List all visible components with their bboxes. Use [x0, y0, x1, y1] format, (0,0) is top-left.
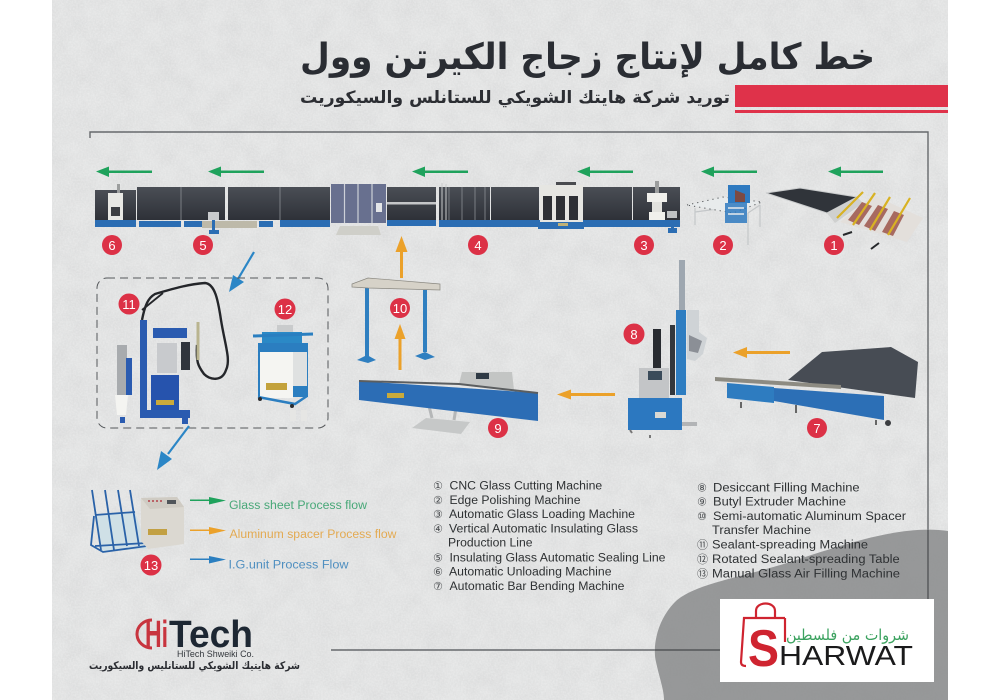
blue arrow: sealant to gas filling — [157, 426, 189, 470]
badge 10: 10 — [393, 301, 407, 316]
key: glass sheet — [190, 497, 368, 512]
machine legend: left column: Edge Polishing Machine — [450, 495, 580, 507]
number badges on the top line: 4 — [474, 238, 482, 253]
machine legend: left column: Automatic Unloading Machine — [449, 566, 612, 578]
machine legend: right column: Sealant-spreading Machine — [712, 540, 868, 552]
blue arrow: line to sealant station — [229, 252, 254, 292]
machine legend: left column: Production Line — [448, 538, 532, 550]
machine legend: right column: Butyl Extruder Machine — [713, 497, 846, 509]
machine legend: left column: ① — [433, 479, 443, 492]
logo english tagline: HiTech Shweiki Co. — [177, 649, 254, 660]
loader units — [540, 182, 583, 226]
machine legend: left column: Insulating Glass Automatic Sealing Line — [450, 552, 666, 564]
key: aluminum spacer: Aluminum spacer Process flow — [230, 529, 397, 541]
logo arc — [137, 620, 152, 648]
key: aluminum spacer — [190, 527, 397, 541]
machine 7: automatic bar bending — [715, 347, 918, 426]
red accent bar — [735, 85, 948, 113]
machine legend: right column: ⑪ — [697, 539, 708, 552]
machine 11: sealant-spreading machine — [115, 283, 228, 424]
machine legend: right column: ⑨ — [697, 496, 707, 509]
machine 10: spacer transfer — [352, 278, 440, 363]
machine legend: left column: Automatic Glass Loading Machine — [449, 509, 635, 521]
badge 7 — [807, 418, 827, 438]
badge 13 — [140, 554, 162, 576]
green process arrows — [96, 166, 883, 177]
machine legend: left column: CNC Glass Cutting Machine — [450, 480, 602, 492]
horizontal frame in line — [387, 202, 436, 204]
orange arrow: spacer transfer up to line — [396, 236, 408, 278]
insulating glass production line — [95, 181, 680, 235]
blue conveyor base — [95, 220, 680, 229]
machine legend: right column: ⑩ — [697, 510, 707, 523]
orange arrow: bar bending to desiccant — [733, 347, 790, 358]
number badges on the top line: 3 — [640, 238, 648, 253]
orange arrow: butyl to transfer — [394, 324, 406, 370]
machine legend: right column: Desiccant Filling Machine — [713, 483, 860, 495]
dashed sealant group box — [97, 278, 328, 428]
shopping bag icon — [741, 604, 785, 666]
number badges on the top line: 5 — [199, 238, 207, 253]
machine legend: right column: ⑧ — [697, 482, 707, 495]
badge 11: 11 — [122, 297, 136, 312]
machine legend: right column: Semi-automatic Aluminum Spacer — [713, 511, 906, 523]
letter S: S — [748, 620, 779, 678]
machine legend: right column: ⑫ — [697, 553, 708, 566]
dark glass panels — [95, 187, 680, 220]
badge 12: 12 — [278, 302, 292, 317]
gray blob corner shape — [655, 530, 948, 700]
badge 10 — [390, 298, 410, 318]
orange arrow: desiccant to butyl — [557, 390, 615, 400]
badge 9: 9 — [494, 421, 502, 436]
key: IG unit: I.G.unit Process Flow — [228, 560, 349, 572]
arabic wordmark: شروات من فلسطين — [786, 626, 909, 644]
badge 8 — [624, 324, 644, 344]
machine legend: left column: ② — [433, 494, 443, 507]
badge 12 — [274, 298, 296, 320]
title: خط كامل لإنتاج زجاج الكيرتن وول — [300, 37, 875, 78]
machine legend: right column: Transfer Machine — [712, 525, 811, 537]
machine legend: right column: Manual Glass Air Filling Machine — [712, 568, 900, 580]
badge 7: 7 — [813, 421, 821, 436]
machine 12: rotated sealant table — [253, 325, 313, 421]
machine legend: left column: ⑦ — [433, 580, 443, 593]
flow key — [190, 497, 397, 572]
badge 13: 13 — [144, 558, 158, 573]
machine 9: butyl extruder — [359, 372, 538, 434]
machine legend: left column: ④ — [433, 523, 443, 536]
number badges on the top line — [102, 235, 844, 255]
machine legend: left column: Vertical Automatic Insulating Glass — [449, 524, 638, 536]
machine legend: left column: Automatic Bar Bending Machine — [450, 581, 624, 593]
machine legend: left column: ⑤ — [433, 551, 443, 564]
frame lines — [90, 132, 928, 650]
machine legend: right column: ⑬ — [697, 567, 708, 580]
panel seams — [181, 183, 485, 220]
number badges on the top line: 1 — [830, 238, 838, 253]
key: IG unit — [190, 556, 349, 572]
unit 6 head — [108, 184, 123, 220]
blob divider overlay — [655, 530, 928, 650]
number badges on the top line: 2 — [719, 238, 727, 253]
machine legend: left column: ⑥ — [433, 565, 443, 578]
HiTech logo — [89, 614, 300, 672]
unit 3 head — [647, 181, 677, 233]
machine 8: desiccant filling — [628, 260, 707, 438]
subtitle: توريد شركة هايتك الشويكي للستانلس والسيكوريت — [300, 88, 730, 108]
logo arabic tagline: شركة هايتيك الشويكي للستانليس والسيكوريت — [89, 660, 300, 672]
logo red Hi: Hi — [145, 614, 168, 656]
machine legend: right column: Rotated Sealant-spreading Table — [712, 554, 900, 566]
badge 11 — [118, 294, 140, 314]
machine legend: right column — [697, 482, 906, 580]
key: glass sheet: Glass sheet Process flow — [229, 500, 368, 512]
Sharwat logo panel — [720, 599, 934, 682]
machine 2: edge polishing table — [687, 185, 762, 245]
logo dark Tech: Tech — [169, 614, 253, 656]
number badges on the top line: 6 — [108, 238, 116, 253]
unit 5 sealing — [202, 212, 257, 234]
badge 9 — [488, 418, 508, 438]
machine legend: left column — [433, 479, 666, 593]
badge 8: 8 — [630, 327, 638, 342]
HARWAT wordmark: HARWAT — [779, 640, 913, 671]
central press — [331, 184, 386, 235]
machine 13: manual air filling — [91, 490, 184, 552]
machine legend: left column: ③ — [433, 508, 443, 521]
machine 1: CNC cutting table and racks — [766, 188, 923, 249]
